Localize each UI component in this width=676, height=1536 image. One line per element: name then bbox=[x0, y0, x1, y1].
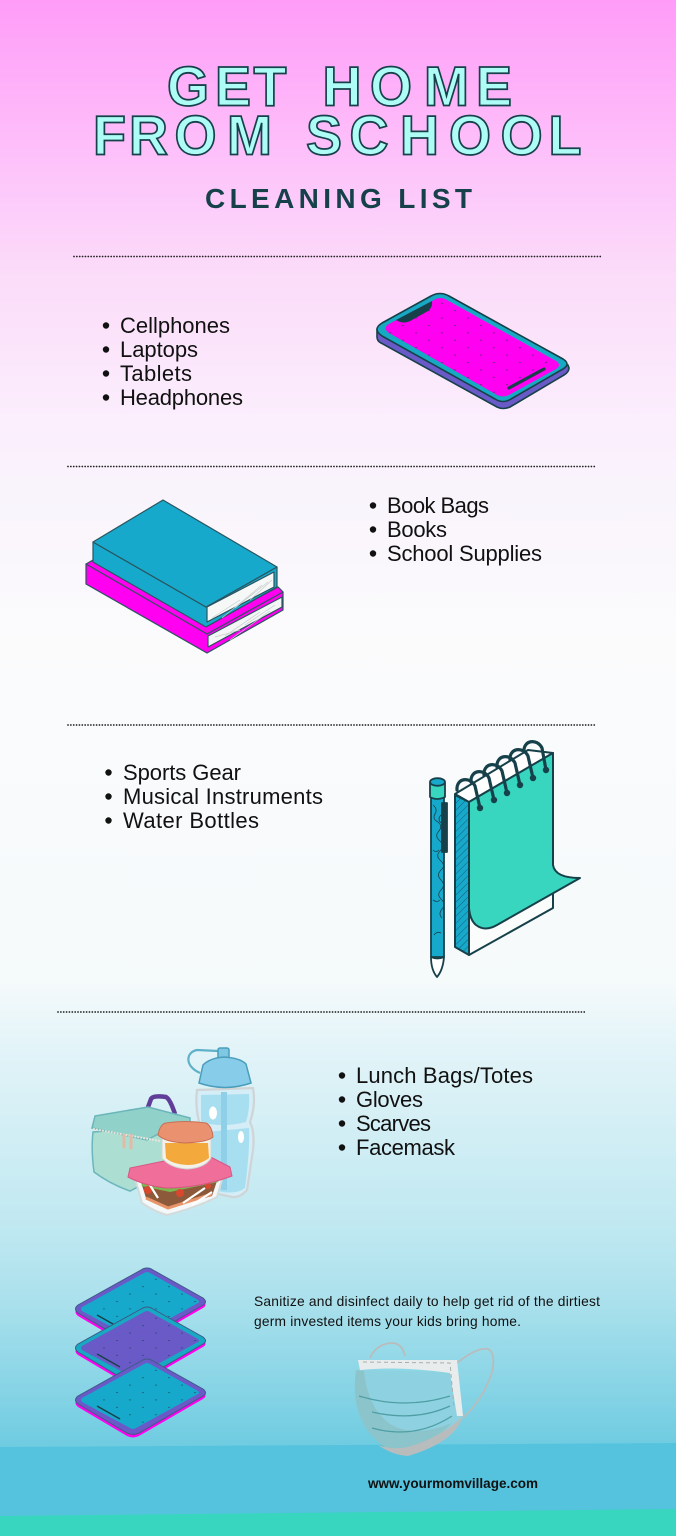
list: sports gear bbox=[105, 760, 323, 833]
list: devices: Tablets bbox=[120, 361, 192, 386]
tablet top bbox=[76, 1268, 206, 1346]
website url: www.yourmomvillage.com bbox=[367, 1476, 538, 1491]
title: GET HOME bbox=[167, 55, 512, 118]
text: sanitize note bbox=[254, 1294, 600, 1329]
list: sports gear: Sports Gear bbox=[123, 760, 241, 785]
icon: water bottle bbox=[188, 1048, 254, 1197]
tablet middle bbox=[76, 1307, 206, 1386]
icon: stacked tablets bbox=[76, 1268, 206, 1438]
tablet bottom bbox=[76, 1359, 206, 1438]
icon: food container with sandwich bbox=[128, 1153, 232, 1215]
list: devices: Laptops bbox=[120, 337, 198, 362]
text: sanitize note: germ invested items your kids bring home. bbox=[254, 1314, 521, 1329]
list: lunch bbox=[339, 1063, 533, 1160]
list: books bbox=[370, 493, 542, 566]
list: devices bbox=[103, 313, 243, 410]
list: lunch: Facemask bbox=[356, 1135, 456, 1160]
icon: smartphone bbox=[377, 294, 569, 408]
footer band green bbox=[0, 1509, 676, 1536]
list: lunch: Lunch Bags/Totes bbox=[356, 1063, 533, 1088]
panel: lunch bbox=[92, 1048, 533, 1215]
icon: spiral notebook bbox=[455, 742, 580, 955]
list: sports gear: Musical Instruments bbox=[123, 784, 323, 809]
panel: books bbox=[86, 493, 542, 653]
footer band blue bbox=[0, 1443, 676, 1536]
list: lunch: Gloves bbox=[356, 1087, 423, 1112]
list: sports gear: Water Bottles bbox=[123, 808, 259, 833]
icon: lunch bag bbox=[92, 1096, 190, 1191]
icon: stacked books bbox=[86, 500, 283, 653]
list: books: Books bbox=[387, 517, 447, 542]
list: devices: Headphones bbox=[120, 385, 243, 410]
panel: sports gear bbox=[105, 742, 580, 977]
list: books: School Supplies bbox=[387, 541, 542, 566]
subtitle: CLEANING LIST bbox=[205, 183, 472, 214]
icon: face mask bbox=[355, 1343, 493, 1456]
title: FROM SCHOOL bbox=[93, 104, 581, 167]
icon: snack jar bbox=[158, 1122, 213, 1169]
icon: pen bbox=[430, 778, 447, 977]
list: lunch: Scarves bbox=[356, 1111, 431, 1136]
panel: devices bbox=[103, 294, 569, 410]
text: sanitize note: Sanitize and disinfect daily to help get rid of the dirtiest bbox=[254, 1294, 600, 1309]
list: books: Book Bags bbox=[387, 493, 489, 518]
title bbox=[93, 55, 581, 167]
list: devices: Cellphones bbox=[120, 313, 230, 338]
